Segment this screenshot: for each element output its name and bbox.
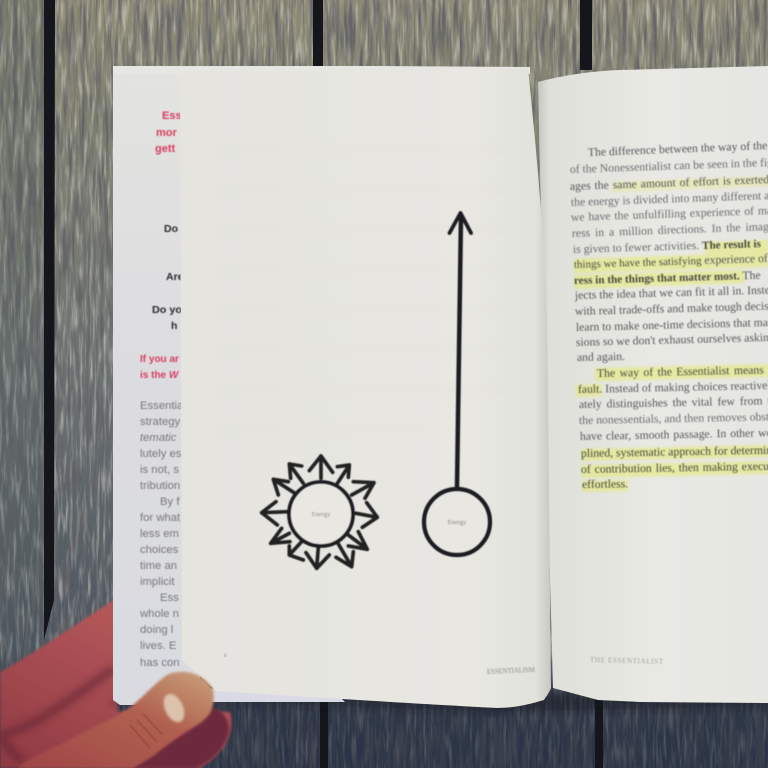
turned page footer: ESSENTIALISM: [487, 666, 536, 676]
body text fragments: doing l: [140, 624, 173, 636]
body text fragments: implicit: [140, 576, 175, 588]
body text fragments: tribution: [140, 480, 180, 492]
red heading fragments: mor: [156, 127, 178, 139]
sun diagram: scattered energy: [262, 456, 377, 568]
bleed-through faint text: [215, 150, 510, 430]
left page behind: [113, 66, 200, 705]
turned page: [180, 68, 551, 708]
thumb holding the page corner: [17, 672, 214, 768]
body text fragments: whole n: [139, 608, 179, 620]
body text fragments: has con: [140, 657, 180, 669]
highlighter marks: [574, 176, 768, 492]
black question fragments: Do yo: [152, 304, 182, 316]
red heading fragments: Ess: [162, 110, 182, 122]
long upward arrow: [450, 213, 471, 487]
energy circle: [289, 482, 353, 546]
body text fragments: choices: [140, 544, 179, 556]
body text fragments: for what: [140, 512, 181, 524]
body text fragments: Essentia: [140, 400, 184, 412]
right page body text: ages the same amount of effort is exerted: [570, 173, 768, 193]
body text fragments: tematic: [140, 432, 177, 444]
body text fragments: less em: [140, 528, 179, 540]
page edge stack under turned page: [205, 688, 345, 702]
black question fragments: [152, 223, 184, 332]
right page body text: effortless.: [582, 477, 628, 491]
arrow diagram: focused energy: [424, 213, 490, 555]
black question fragments: Are: [166, 271, 184, 283]
radiating arrows: [262, 456, 377, 568]
right page body text: and again.: [577, 350, 625, 364]
top edge of page block: [113, 66, 530, 74]
body text fragments: is not, s: [140, 464, 179, 476]
book shadow: [113, 690, 768, 712]
right page body text: ress in the things that matter most. The: [574, 269, 761, 287]
red heading fragments: [140, 110, 182, 381]
page number: 6: [224, 654, 227, 659]
body text fragments: lives. E: [140, 640, 177, 652]
red heading fragments: If you ar: [140, 354, 179, 365]
right page body text: [570, 139, 768, 491]
body text fragments: By f: [160, 496, 180, 508]
knuckle creases: [130, 714, 163, 748]
body text fragments: strategy: [140, 416, 181, 428]
right page body text: is given to fewer activities. The result is: [573, 237, 762, 256]
body text fragments: lutely es: [140, 448, 182, 460]
right page body text: The way of the Essentialist means: [597, 363, 764, 380]
right page body text: The difference between the way of the: [588, 139, 768, 159]
fingers behind the book: [0, 600, 231, 768]
red heading fragments: is the W: [140, 370, 180, 381]
body text fragments: time an: [140, 560, 177, 572]
energy label: Energy: [448, 519, 467, 526]
energy label: Energy: [312, 511, 331, 518]
right page body text: things we have the satisfying experience of: [574, 252, 768, 271]
body text fragments: [139, 400, 184, 669]
upper fingers: [0, 600, 231, 768]
right page: [538, 66, 768, 703]
right page footer: THE ESSENTIALIST: [590, 656, 664, 666]
black question fragments: Do: [164, 223, 178, 235]
finger crease: [0, 668, 114, 762]
red heading fragments: gett: [155, 143, 176, 155]
body text fragments: Ess: [160, 592, 179, 604]
thumbnail: [160, 691, 188, 725]
finger shadow behind thumb: [130, 705, 229, 768]
energy circle: [424, 489, 490, 555]
black question fragments: h: [171, 320, 177, 332]
